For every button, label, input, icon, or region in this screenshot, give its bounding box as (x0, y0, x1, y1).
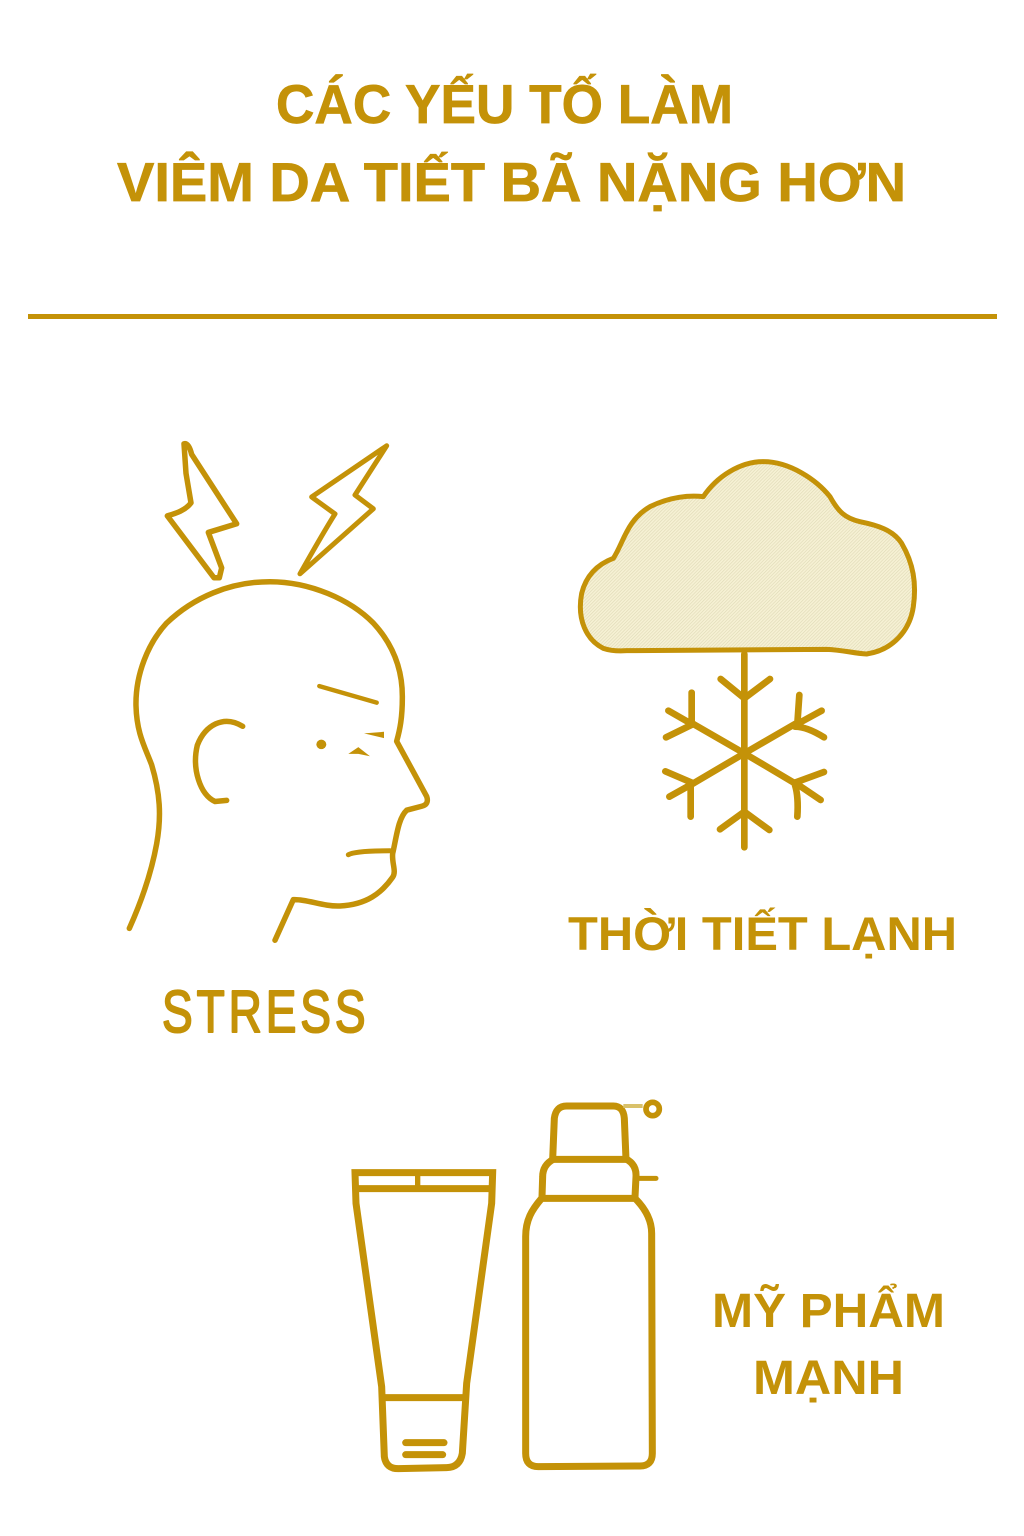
icon: cosmetic tube and spray bottle (355, 1102, 659, 1469)
icon: snowflake (665, 654, 824, 847)
icon: eye marks (316, 732, 384, 756)
title: VIÊM DA TIẾT BÃ NẶNG HƠN (117, 151, 906, 213)
title: CÁC YẾU TỐ LÀM (276, 73, 733, 135)
panel: harsh cosmetics (355, 1102, 945, 1469)
panel: cold weather (568, 462, 957, 960)
icon: stressed head with lightning bolts (129, 444, 427, 940)
icon: left lightning bolt (167, 444, 237, 578)
label: harsh cosmetics (712, 1283, 945, 1405)
icon: cloud (580, 462, 915, 654)
label: harsh cosmetics: MẠNH (753, 1352, 904, 1405)
icon: spray bottle (526, 1102, 659, 1467)
icon: mouth (348, 851, 390, 855)
icon: right lightning bolt (300, 446, 387, 574)
label: stress: STRESS (162, 980, 366, 1045)
panel: stress (129, 444, 427, 1045)
label: harsh cosmetics: MỸ PHẨM (712, 1283, 945, 1338)
icon: eyebrow (319, 686, 377, 703)
title (117, 73, 906, 213)
icon: tube (355, 1173, 493, 1469)
label: cold weather: THỜI TIẾT LẠNH (568, 907, 957, 960)
icon: ear (196, 721, 243, 802)
icon: cloud and snowflake (580, 462, 915, 847)
icon: head outline (129, 582, 427, 940)
